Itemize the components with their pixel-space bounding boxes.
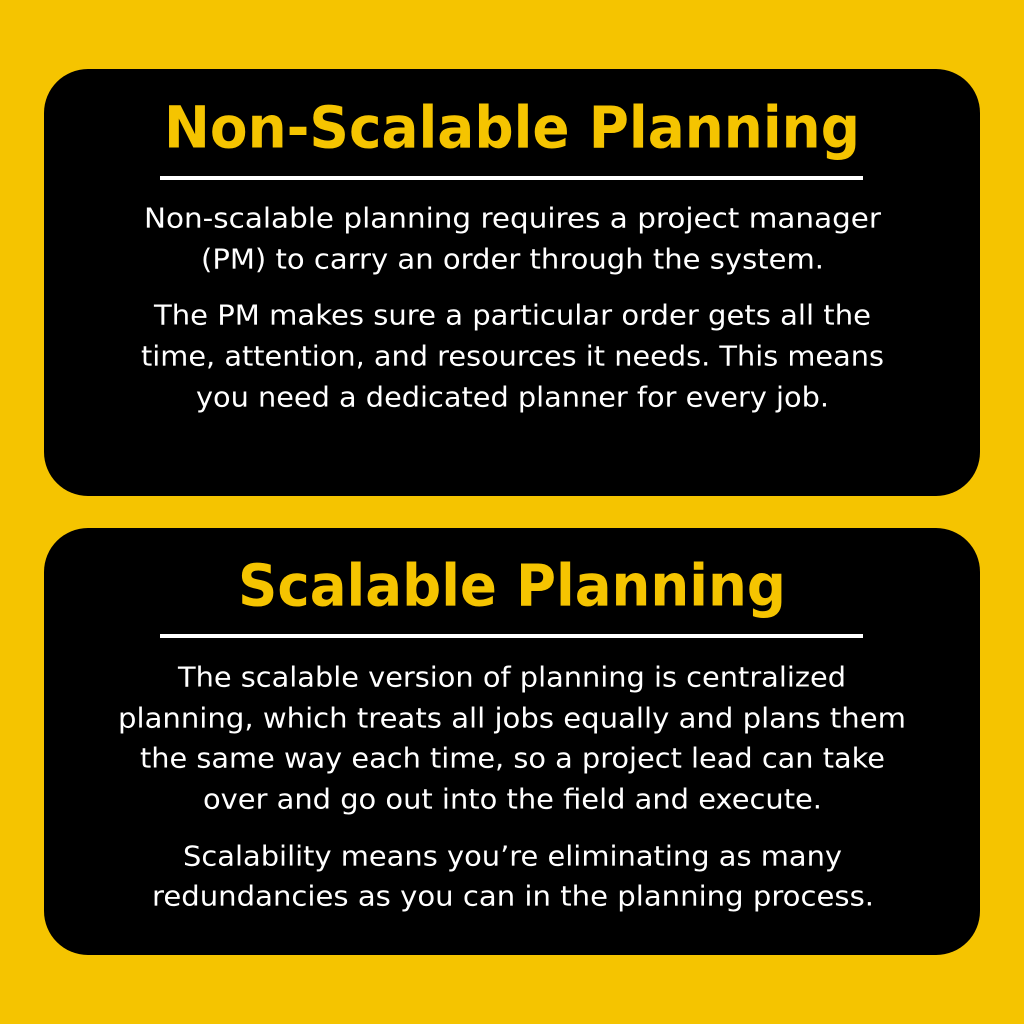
text block: eliminating redundancies: redundancies as you can in the planning process.: [152, 880, 874, 912]
heading: scalable planning: Scalable Planning: [238, 552, 786, 620]
panel: non-scalable planning: [44, 69, 980, 496]
text block: dedicated planner: The PM makes sure a particular order gets all the: [153, 298, 871, 332]
text block: centralized planning: over and go out into the field and execute.: [203, 782, 822, 816]
text block: dedicated planner: you need a dedicated planner for every job.: [196, 380, 829, 414]
text block: eliminating redundancies: [152, 840, 874, 912]
text block: centralized planning: the same way each time, so a project lead can take: [140, 742, 885, 774]
text block: centralized planning: The scalable version of planning is centralized: [177, 660, 846, 694]
panel: scalable planning: [44, 528, 980, 955]
text block: dedicated planner: time, attention, and resources it needs. This means: [141, 340, 884, 372]
text block: centralized planning: planning, which treats all jobs equally and plans them: [118, 702, 906, 734]
text block: eliminating redundancies: Scalability means you’re eliminating as many: [183, 840, 842, 872]
text block: project manager definition: (PM) to carry an order through the system.: [201, 242, 824, 276]
panel background: [44, 69, 980, 496]
heading: non-scalable planning: Non-Scalable Planning: [164, 94, 860, 162]
panel background: [44, 528, 980, 955]
text block: dedicated planner: [141, 298, 884, 414]
text block: project manager definition: [144, 202, 882, 276]
text block: centralized planning: [118, 660, 906, 816]
text block: project manager definition: Non-scalable planning requires a project manager: [144, 202, 882, 234]
